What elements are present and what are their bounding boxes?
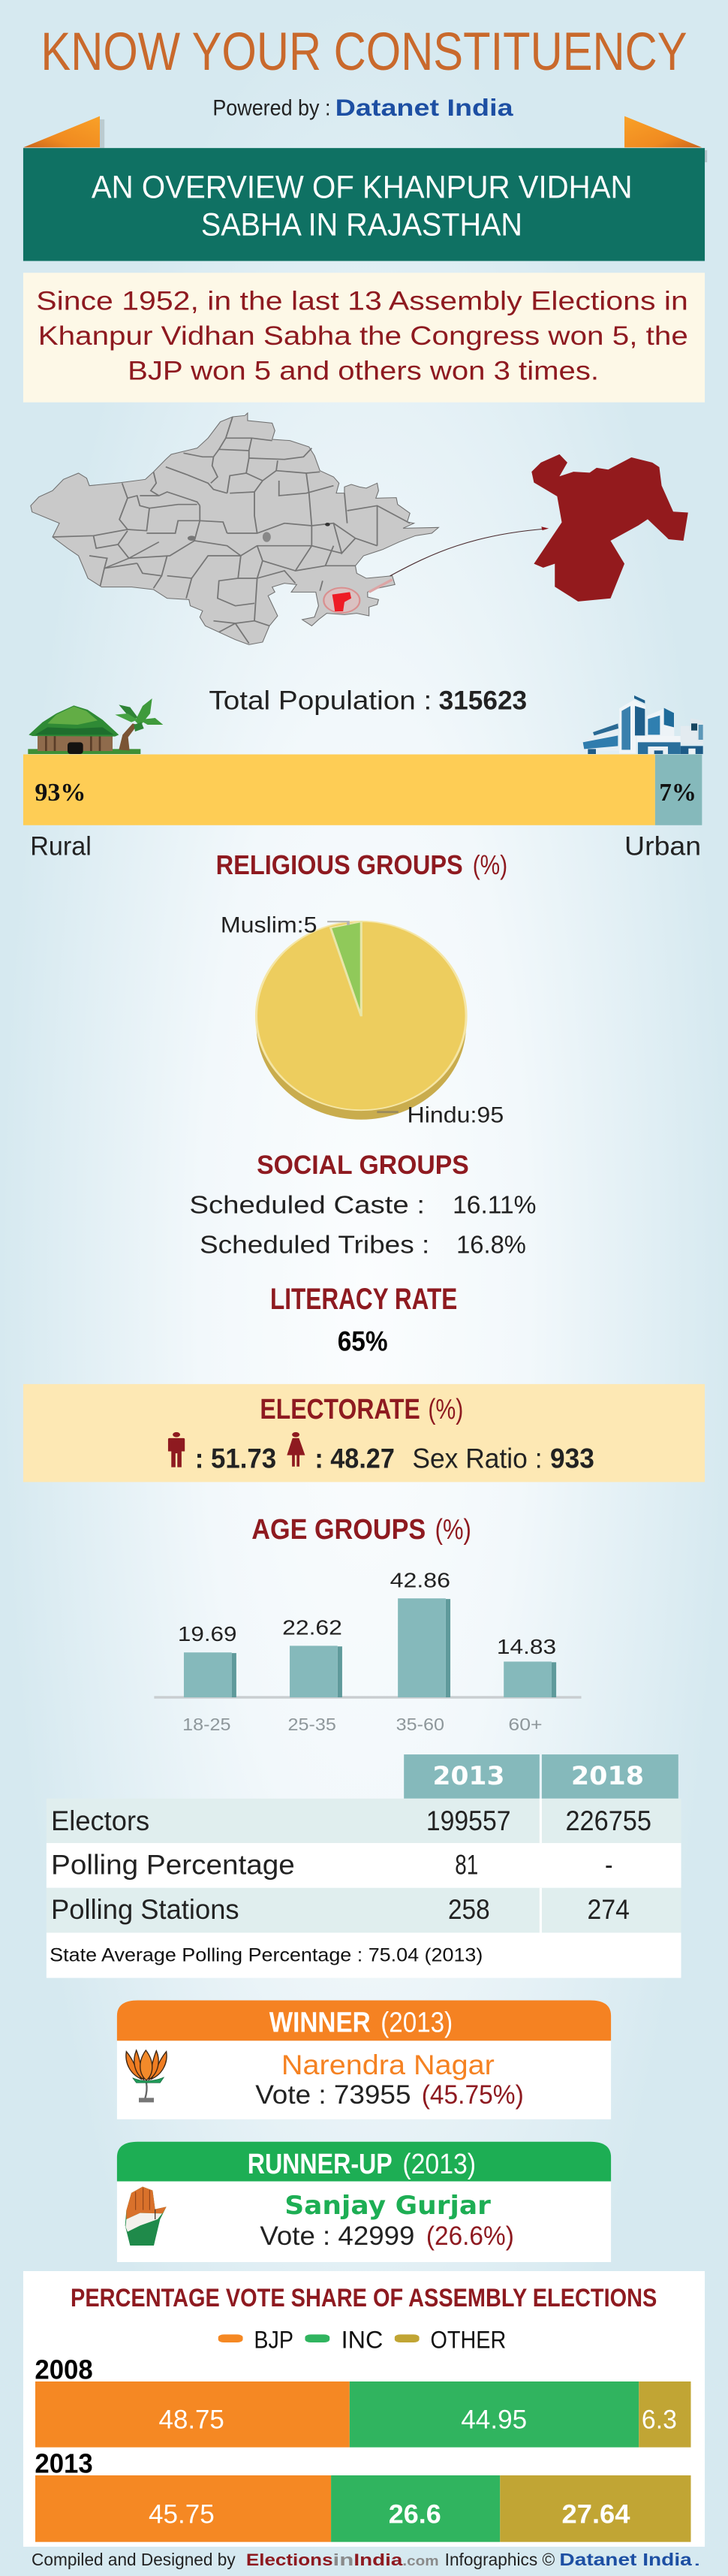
footer credits: .com xyxy=(402,2553,439,2568)
heading: social groups: SOCIAL GROUPS xyxy=(257,1150,469,1180)
powered by line: Powered by : xyxy=(212,95,330,120)
stacked bar: 2013: 45.75 xyxy=(149,2499,215,2529)
ribbon fold left xyxy=(23,116,100,147)
heading: religious groups: RELIGIOUS GROUPS xyxy=(216,849,463,880)
icon: lotus xyxy=(126,2050,167,2102)
table: electors and polling: 226755 xyxy=(565,1806,651,1837)
label: 2013: 2013 xyxy=(35,2448,93,2479)
religion and social section xyxy=(189,849,537,1259)
label: 2008: 2008 xyxy=(35,2354,93,2385)
panel: electorate: 933 xyxy=(550,1443,594,1474)
scheduled tribes: 16.8% xyxy=(456,1231,526,1259)
map and population section xyxy=(23,454,702,861)
heading: literacy rate: LITERACY RATE xyxy=(270,1282,457,1316)
literacy value: 65% xyxy=(338,1326,388,1357)
scheduled tribes: Scheduled Tribes : xyxy=(200,1231,429,1259)
panel: electorate: Sex Ratio : xyxy=(412,1443,543,1474)
powered by line xyxy=(212,95,513,121)
bar chart: age groups: 14.83 xyxy=(497,1636,556,1658)
panel: runner-up: Vote : 42999 xyxy=(260,2221,414,2251)
literacy electorate age section xyxy=(23,1282,705,1734)
stacked bar: rural urban: 93% xyxy=(35,778,86,807)
panel: winner: Vote : 73955 xyxy=(255,2080,411,2110)
panel: winner: (2013) xyxy=(381,2006,453,2038)
bar chart: age groups: 19.69 xyxy=(178,1623,236,1645)
banner xyxy=(23,119,707,261)
pie chart xyxy=(221,912,504,1127)
stacked bar: 2008 xyxy=(35,2381,691,2448)
table: electors and polling: 2018 xyxy=(571,1761,644,1790)
panel: runner-up: (26.6%) xyxy=(426,2221,514,2251)
stacked bar: 2008: 48.75 xyxy=(159,2405,224,2434)
panel: electorate: : 48.27 xyxy=(314,1443,395,1474)
table: electors and polling: Electors xyxy=(51,1806,149,1837)
stacked bar: rural urban: 7% xyxy=(659,778,696,807)
panel: electorate: : 51.73 xyxy=(195,1443,276,1474)
powered by line: Datanet India xyxy=(335,95,513,121)
bar chart: age groups: 22.62 xyxy=(282,1617,342,1639)
footer credits: India xyxy=(353,2550,403,2569)
religion and social section: (%) xyxy=(473,849,507,880)
icon: hand xyxy=(125,2187,167,2246)
table: electors and polling: Polling Stations xyxy=(51,1895,239,1926)
table: electors and polling: 2013 xyxy=(433,1761,504,1790)
legend: BJP xyxy=(254,2327,293,2354)
table: electors and polling: 199557 xyxy=(426,1806,510,1837)
stacked bar: 2008: 44.95 xyxy=(461,2405,527,2434)
heading: age groups: (%) xyxy=(435,1514,471,1546)
table: electors and polling: State Average Polling Percentage : 75.04 (2013) xyxy=(50,1945,483,1965)
icon: city buildings xyxy=(583,695,703,754)
rural label: Rural xyxy=(30,831,92,861)
scheduled caste: Scheduled Caste : xyxy=(189,1191,425,1219)
panel: winner: Narendra Nagar xyxy=(281,2050,495,2081)
pie chart: Hindu:95 xyxy=(408,1102,504,1127)
table: electors and polling xyxy=(47,1754,681,1978)
table: electors and polling: 258 xyxy=(448,1895,490,1926)
icon: hut and palm xyxy=(28,698,163,754)
panel: runner-up: (2013) xyxy=(402,2147,476,2179)
table: electors and polling: - xyxy=(605,1850,613,1881)
panel: vote share xyxy=(23,2271,705,2547)
icon: female xyxy=(287,1432,305,1467)
bar chart: age groups: 42.86 xyxy=(390,1570,450,1592)
legend: INC xyxy=(341,2327,383,2354)
bar chart: age groups: 60+ xyxy=(508,1715,543,1734)
panel: winner: (45.75%) xyxy=(422,2080,524,2110)
stacked bar: 2008: 6.3 xyxy=(642,2405,677,2434)
pie chart: Muslim:5 xyxy=(221,912,317,937)
bar chart: age groups: 18-25 xyxy=(182,1715,230,1734)
arrow xyxy=(390,526,549,576)
constituency shape xyxy=(531,454,688,602)
footer credits xyxy=(32,2550,702,2569)
panel: electorate: ELECTORATE xyxy=(260,1394,420,1425)
table: electors and polling: 274 xyxy=(588,1895,630,1926)
panel: electorate: (%) xyxy=(428,1394,463,1425)
table: electors and polling: 81 xyxy=(455,1850,478,1881)
summary panel xyxy=(23,273,705,403)
bar chart: age groups xyxy=(154,1570,582,1734)
footer credits: in xyxy=(333,2550,353,2569)
heading: age groups: AGE GROUPS xyxy=(251,1514,426,1546)
footer credits: . xyxy=(693,2550,702,2569)
panel: vote share: OTHER xyxy=(430,2327,506,2354)
table and candidates section xyxy=(47,1754,681,2262)
table: electors and polling: Polling Percentage xyxy=(51,1850,295,1881)
map: Rajasthan districts xyxy=(31,413,438,644)
panel: winner xyxy=(117,2000,611,2119)
heading: religious groups xyxy=(216,849,507,880)
panel: runner-up: RUNNER-UP xyxy=(248,2147,393,2179)
bar chart: age groups: 35-60 xyxy=(396,1715,444,1734)
panel: electorate xyxy=(23,1384,705,1482)
stacked bar: 2013: 27.64 xyxy=(562,2499,630,2529)
scheduled caste: 16.11% xyxy=(453,1191,537,1219)
stacked bar: 2013: 26.6 xyxy=(389,2499,441,2529)
footer credits: Elections xyxy=(246,2550,333,2569)
total population: Total Population : xyxy=(209,686,432,715)
footer credits: Infographics © xyxy=(445,2550,555,2569)
panel: runner-up xyxy=(117,2142,611,2262)
stacked bar: rural urban xyxy=(23,754,702,825)
ribbon fold right xyxy=(624,116,702,147)
total population: 315623 xyxy=(439,686,527,715)
icon: male xyxy=(168,1432,185,1467)
panel: winner: WINNER xyxy=(269,2006,371,2038)
footer credits: Compiled and Designed by xyxy=(32,2550,236,2569)
panel: runner-up: Sanjay Gurjar xyxy=(284,2191,491,2221)
stacked bar: 2013 xyxy=(35,2475,691,2542)
vote share section xyxy=(23,2271,705,2569)
bar chart: age groups: 25-35 xyxy=(288,1715,336,1734)
legend xyxy=(218,2327,506,2354)
header section xyxy=(23,22,707,403)
